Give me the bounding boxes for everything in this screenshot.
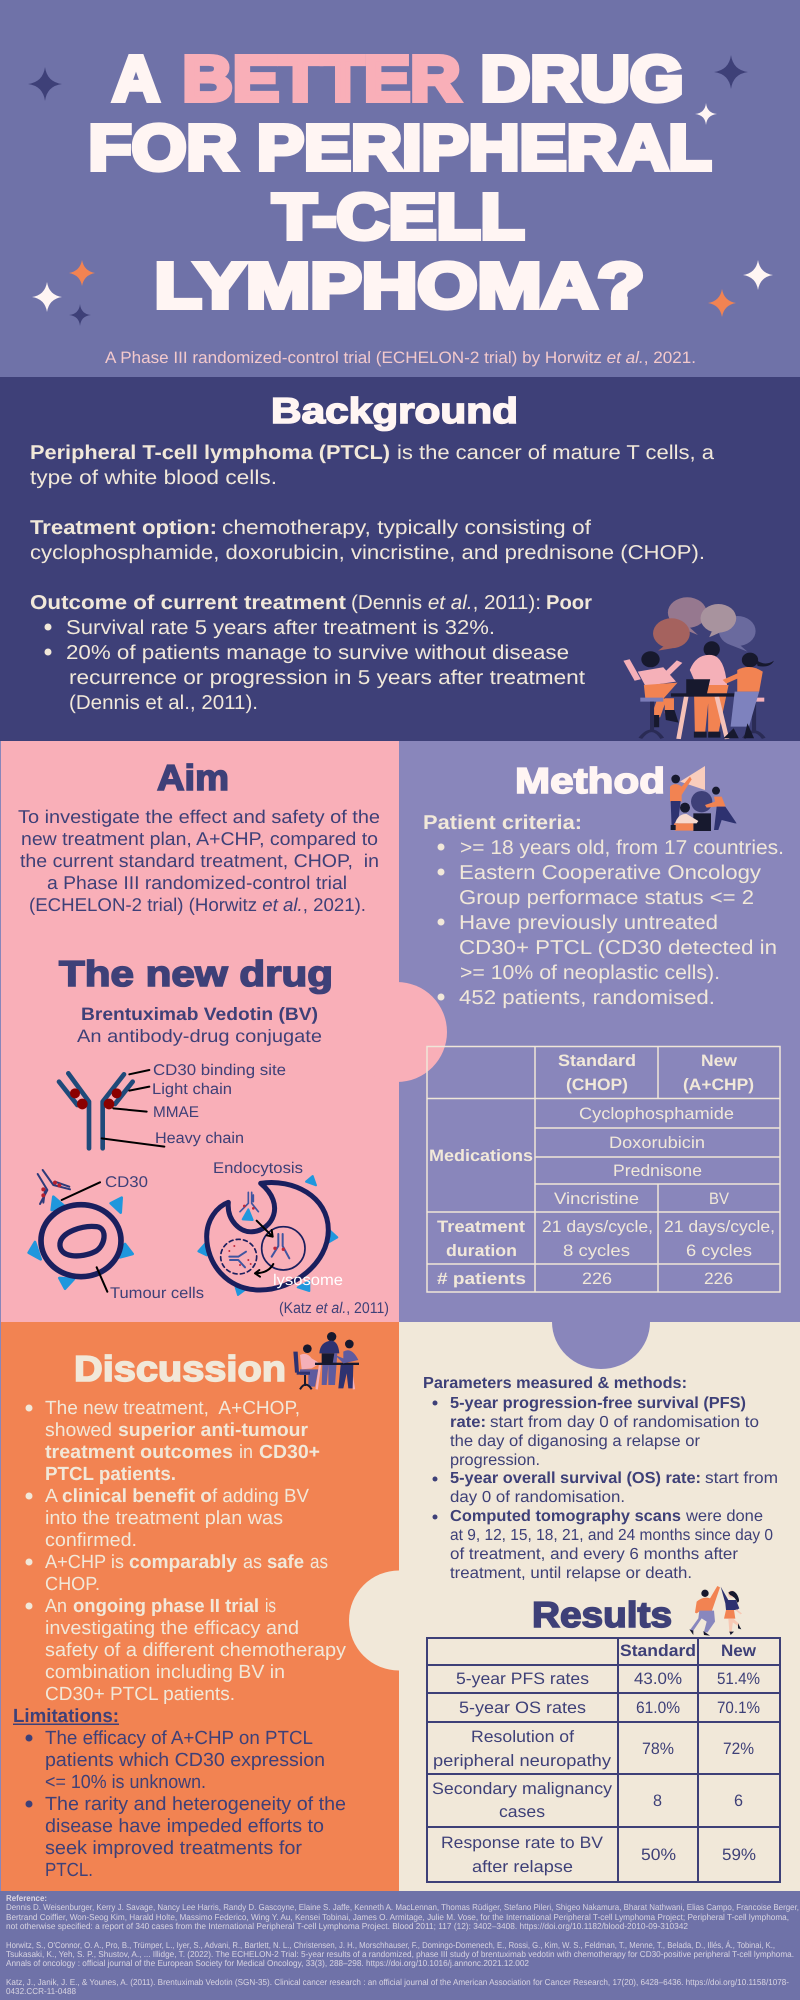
table: results: Resolution of (471, 1728, 574, 1746)
text block: discussion points: treatment outcomes (45, 1442, 233, 1463)
title: A (112, 42, 160, 114)
table: treatment arms: Standard (558, 1052, 636, 1070)
text block: discussion points: The new treatment, A+CHOP, (45, 1398, 300, 1419)
diagram: endocytosis and lysosome (198, 1160, 389, 1317)
text block: treatment option: Treatment option: (30, 517, 217, 539)
title: LYMPHOMA? (154, 250, 644, 322)
table: results: New (721, 1642, 756, 1660)
text block: outcome of current treatment: (Dennis et al., 2011): (351, 592, 541, 614)
text block: limitations: disease have impeded efforts to (45, 1816, 324, 1837)
text block: discussion points: in (239, 1442, 253, 1463)
table: treatment arms: (A+CHP) (683, 1076, 754, 1094)
table: treatment arms: Medications (429, 1147, 533, 1165)
table: treatment arms: 21 days/cycle, (664, 1218, 775, 1236)
text block: patient criteria (423, 812, 784, 1009)
text block: outcome of current treatment (30, 592, 592, 714)
text block: patient criteria: Patient criteria: (423, 812, 582, 834)
text block: parameters measured and methods: the day of diganosing a relapse or (450, 1433, 701, 1450)
text block: discussion points: is (265, 1596, 276, 1617)
text block: discussion points: as (243, 1552, 262, 1573)
diagram: endocytosis and lysosome: (Katz et al., 2011) (279, 1300, 389, 1317)
text block: aim (18, 806, 380, 915)
table: results: 59% (722, 1846, 756, 1864)
text block: discussion points: CD30+ PTCL patients. (45, 1684, 235, 1705)
table: results: 43.0% (634, 1670, 682, 1688)
panel: discussion (0, 1322, 400, 1891)
text block: PTCL definition: Peripheral T-cell lymphoma (PTCL) (30, 442, 390, 464)
text block: parameters measured and methods: 5-year overall survival (OS) rate: (450, 1470, 701, 1487)
diagram: endocytosis and lysosome: lysosome (273, 1272, 343, 1289)
table: results: 5-year PFS rates (456, 1670, 589, 1688)
text block: treatment option (30, 517, 705, 564)
text block: discussion points: f adding BV (212, 1486, 309, 1507)
text block: discussion points: into the treatment plan was (45, 1508, 283, 1529)
text block: outcome of current treatment: (Dennis et al., 2011). (69, 692, 258, 714)
diagram: antibody-drug conjugate structure: CD30 binding site (153, 1062, 286, 1079)
title: DRUG (480, 42, 684, 114)
text block: limitations: The rarity and heterogeneity of the (45, 1794, 346, 1815)
table: results: Response rate to BV (441, 1834, 603, 1852)
text block: parameters measured and methods: of treatment, and every 6 months after (450, 1546, 739, 1563)
subtitle: A Phase III randomized-control trial (ECHELON-2 trial) by Horwitz et al., 2021. (105, 349, 696, 367)
icon: two people high-fiving (689, 1586, 742, 1636)
text block: parameters measured and methods: start from (705, 1470, 778, 1487)
text block: parameters measured and methods (423, 1375, 778, 1582)
text block: discussion points: An (45, 1596, 67, 1617)
heading: Results: Results (532, 1594, 672, 1635)
table: treatment arms: Doxorubicin (609, 1134, 705, 1152)
text block: drug name: Brentuximab Vedotin (BV) (81, 1004, 318, 1024)
panel: title header (0, 0, 800, 378)
panel: background (0, 377, 800, 742)
panel: aim and new drug (0, 741, 400, 1323)
table: results: 6 (734, 1792, 743, 1810)
text block: parameters measured and methods: rate: (450, 1414, 486, 1431)
icon: people arranging shapes (670, 766, 737, 831)
diagram: antibody-drug conjugate structure: MMAE (153, 1104, 199, 1121)
text block: discussion points: A+CHP is (45, 1552, 124, 1573)
text block: parameters measured and methods: 5-year progression-free survival (PFS) (450, 1395, 746, 1412)
table: treatment arms: 226 (582, 1270, 612, 1288)
table: treatment arms: New (701, 1052, 737, 1070)
text block: drug name: An antibody-drug conjugate (77, 1026, 322, 1046)
text block: outcome of current treatment: Poor (546, 592, 592, 614)
table: treatment arms: 6 cycles (686, 1242, 752, 1260)
text block: aim: (ECHELON-2 trial) (Horwitz et al., 2021). (29, 894, 366, 915)
icon: colleagues at a desk (293, 1332, 359, 1389)
table: treatment arms: Treatment (437, 1218, 526, 1236)
text block: parameters measured and methods: Computed tomography scans (450, 1508, 681, 1525)
title (88, 42, 712, 322)
text block: aim: the current standard treatment, CHOP, in (20, 850, 379, 871)
text block: PTCL definition: type of white blood cells. (30, 467, 277, 489)
decorative circle joining aim and method (347, 982, 447, 1082)
text block: discussion points: CHOP. (45, 1574, 100, 1595)
diagram: antibody-drug conjugate structure: Heavy chain (155, 1130, 244, 1147)
table: treatment arms: BV (709, 1190, 729, 1208)
text block: limitations: <= 10% is unknown. (45, 1772, 206, 1793)
text block: aim: To investigate the effect and safety of the (18, 806, 380, 827)
text block: outcome of current treatment: recurrence or progression in 5 years after treatment (69, 667, 586, 689)
table: treatment arms: duration (446, 1242, 517, 1260)
table: treatment arms: 21 days/cycle, (542, 1218, 653, 1236)
table: treatment arms: Vincristine (554, 1190, 639, 1208)
diagram: tumour cell with CD30: CD30 (105, 1174, 148, 1191)
table: treatment arms: Cyclophosphamide (579, 1105, 734, 1123)
diagram: endocytosis and lysosome: Endocytosis (213, 1160, 303, 1177)
text block: parameters measured and methods: progression. (450, 1452, 540, 1469)
heading: Background: Background (271, 390, 518, 431)
panel: parameters and results (399, 1322, 800, 1891)
diagram: antibody-drug conjugate structure: Light chain (152, 1081, 232, 1098)
heading: Discussion: Discussion (74, 1348, 286, 1389)
table: results (427, 1638, 780, 1882)
text block: discussion points: PTCL patients. (45, 1464, 176, 1485)
table: results: 70.1% (717, 1699, 760, 1717)
table: results: Secondary malignancy (432, 1780, 613, 1798)
text block: parameters measured and methods: at 9, 12, 15, 18, 21, and 24 months since day 0 (450, 1527, 773, 1544)
text block: outcome of current treatment: Survival rate 5 years after treatment is 32%. (66, 617, 495, 639)
text block: limitations: patients which CD30 expression (45, 1750, 325, 1771)
diagram: antibody-drug conjugate structure (59, 1062, 286, 1148)
text block: patient criteria: Eastern Cooperative Oncology (459, 862, 761, 884)
text block: discussion points (26, 1398, 347, 1705)
table: treatment arms: 226 (704, 1270, 733, 1288)
text block: outcome of current treatment: Outcome of current treatment (30, 592, 346, 614)
table: results: peripheral neuropathy (433, 1752, 612, 1770)
text block: patient criteria: Group performace status <= 2 (459, 887, 754, 909)
text block: parameters measured and methods: treatment, until relapse or death. (450, 1565, 692, 1582)
text block: patient criteria: Have previously untreated (459, 912, 718, 934)
table: treatment arms (427, 1046, 780, 1292)
text block: discussion points: CD30+ (259, 1442, 320, 1463)
heading: Method: Method (515, 760, 665, 801)
text block: limitations: The efficacy of A+CHP on PTCL (45, 1728, 313, 1749)
table: results: 51.4% (717, 1670, 760, 1688)
text block: discussion points: clinical benefit o (62, 1486, 212, 1507)
table: results: 72% (723, 1740, 754, 1758)
icon: sparkles (28, 55, 773, 326)
title: BETTER (182, 42, 460, 114)
title: T-CELL (272, 180, 524, 252)
text block: discussion points: safety of a different chemotherapy (45, 1640, 347, 1661)
diagram: tumour cell with CD30 (29, 1170, 204, 1302)
table: results: 8 (653, 1792, 662, 1810)
table: treatment arms: Prednisone (613, 1162, 702, 1180)
table: results: cases (499, 1803, 545, 1821)
panel: references: not otherwise specified: a report of 340 cases from the International Peripheral T-cell Lymphoma Project. Blood 2011; 117 (12): 3402–3408. https://doi.org/10.1182/blood-2010-09-310342 (6, 1921, 688, 1931)
text block: discussion points: investigating the efficacy and (45, 1618, 299, 1639)
text block: PTCL definition: is the cancer of mature T cells, a (397, 442, 715, 464)
table: results: after relapse (472, 1858, 573, 1876)
text block: discussion points: A (45, 1486, 58, 1507)
table: results: 78% (642, 1740, 674, 1758)
panel: references (0, 1891, 800, 2000)
decorative half circle joining discussion and results (349, 1570, 399, 1670)
table: treatment arms: # patients (437, 1270, 526, 1288)
text block: aim: a Phase III randomized-control trial (47, 872, 347, 893)
table: treatment arms: 8 cycles (563, 1242, 630, 1260)
text block: patient criteria: >= 18 years old, from 17 countries. (460, 837, 784, 859)
text block: discussion points: superior anti-tumour (118, 1420, 309, 1441)
table: results: 50% (641, 1846, 676, 1864)
text block: discussion points: comparably (129, 1552, 237, 1573)
heading: Aim: Aim (157, 757, 229, 798)
text block: discussion points: as (310, 1552, 328, 1573)
panel: references: 0432.CCR-11-0488 (6, 1986, 76, 1996)
diagram: tumour cell with CD30: Tumour cells (110, 1285, 204, 1302)
text block: patient criteria: CD30+ PTCL (CD30 detected in (459, 937, 777, 959)
text block: drug name (77, 1004, 322, 1046)
table: treatment arms: (CHOP) (566, 1076, 628, 1094)
table: results: 5-year OS rates (459, 1699, 586, 1717)
heading: The new drug: The new drug (59, 953, 333, 994)
text block: parameters measured and methods: were done (685, 1508, 763, 1525)
table: results: 61.0% (636, 1699, 680, 1717)
text block: patient criteria: >= 10% of neoplastic cells). (460, 962, 720, 984)
panel: references: Reference: (6, 1893, 47, 1903)
text block: patient criteria: 452 patients, randomised. (459, 987, 715, 1009)
text block: limitations (13, 1706, 346, 1881)
text block: discussion points: safe (267, 1552, 304, 1573)
text block: limitations: seek improved treatments for (45, 1838, 303, 1859)
text block: aim: new treatment plan, A+CHP, compared to (21, 828, 378, 849)
text block: parameters measured and methods: start from day 0 of randomisation to (490, 1414, 759, 1431)
table: results: Standard (620, 1642, 696, 1660)
title: FOR PERIPHERAL (88, 112, 712, 184)
text block: limitations: PTCL. (45, 1860, 93, 1881)
text block: discussion points: ongoing phase II trial (73, 1596, 259, 1617)
text block: parameters measured and methods: day 0 of randomisation. (450, 1489, 625, 1506)
icon: three people talking at a table (627, 597, 774, 739)
text block: outcome of current treatment: 20% of patients manage to survive without disease (66, 642, 569, 664)
text block: treatment option: chemotherapy, typically consisting of (222, 517, 591, 539)
text block: discussion points: confirmed. (45, 1530, 137, 1551)
decorative half circle (552, 1322, 650, 1369)
text block: treatment option: cyclophosphamide, doxorubicin, vincristine, and prednisone (CHOP). (30, 542, 705, 564)
panel: method (347, 741, 800, 1322)
text block: parameters measured and methods: Parameters measured & methods: (423, 1375, 687, 1392)
text block: discussion points: showed (45, 1420, 112, 1441)
text block: limitations: Limitations: (13, 1706, 119, 1727)
text block: discussion points: combination including BV in (45, 1662, 285, 1683)
text block: PTCL definition (30, 442, 715, 489)
panel: references: Annals of oncology : official journal of the European Society for Medical Oncology, 33(3), 288–298. https://doi.org/10.1016/j.annonc.2021.12.002 (6, 1958, 529, 1968)
